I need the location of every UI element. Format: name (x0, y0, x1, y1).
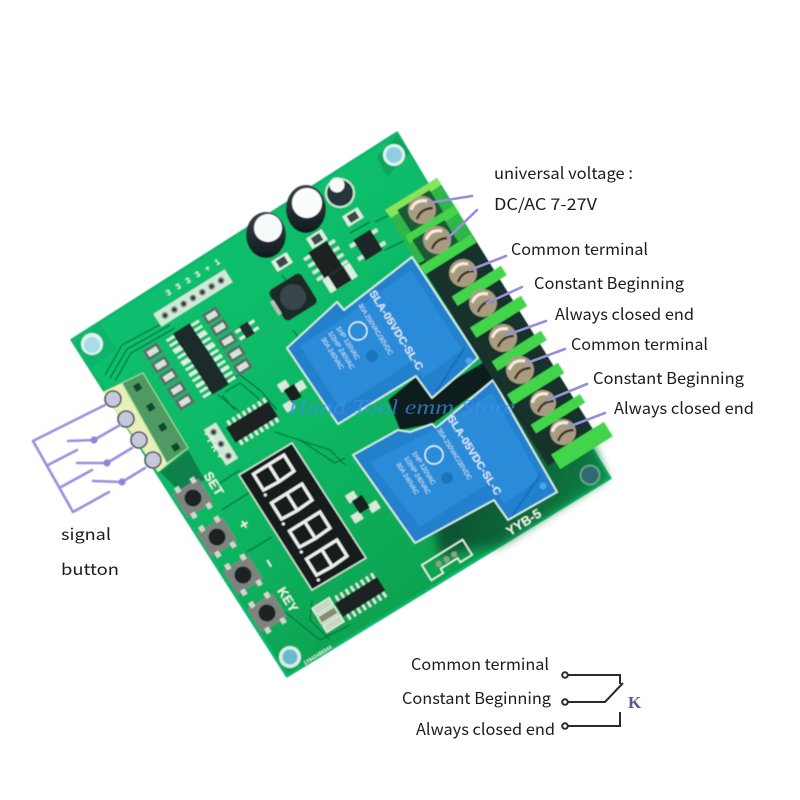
relay 2 small ratings (394, 450, 437, 496)
relay 1 (287, 257, 478, 424)
watermark: Hand Tool emm Store (287, 395, 515, 419)
small passives near capacitors (271, 207, 364, 272)
button + (195, 514, 239, 560)
small transistor (234, 318, 260, 342)
relay 2 ratings: 30A 250VAC/30VDC (435, 427, 473, 482)
relay 1 ratings: 30A 250VAC/30VDC (356, 302, 394, 357)
relay 1 small ratings: 1HP 120VAC (334, 325, 361, 362)
terminal 7 (517, 373, 585, 433)
terminal 8 (537, 400, 613, 469)
relay 2 small ratings: 1/2HP 240VAC (402, 455, 431, 496)
relay 1 small ratings: 30A 240VAC (319, 336, 345, 371)
button KEY (245, 590, 289, 636)
relay 2 small ratings: 1HP 120VAC (410, 450, 437, 487)
SOP main chip (223, 397, 281, 447)
bottom driver IC (331, 572, 389, 622)
K symbol: K (628, 693, 642, 712)
mounting hole: bottom (279, 646, 301, 668)
mounting hole: top (377, 135, 410, 177)
dark lower right PCB area (430, 400, 606, 556)
digit 2 (269, 484, 316, 526)
board silk: small code: 17943489244 (303, 645, 333, 667)
TR header (201, 422, 238, 466)
label: constant beginning 1: Constant Beginning (534, 270, 684, 294)
label: common terminal 1: Common terminal (511, 236, 648, 260)
capacitor 1 (246, 212, 286, 258)
resistors left and right of opto row (144, 308, 251, 409)
mounting hole: right (580, 464, 600, 486)
board silk: model: YYB-5 (503, 506, 544, 539)
digit 4 (304, 540, 351, 582)
button silk labels (201, 469, 301, 615)
digit 3 (287, 512, 334, 554)
push buttons (171, 475, 289, 636)
label: always closed end 2: Always closed end (614, 395, 754, 419)
shadow between relays (388, 362, 494, 430)
label: common terminal 2: Common terminal (571, 331, 708, 355)
button silk labels: KEY (274, 584, 301, 615)
legend text: always closed end: Always closed end (416, 716, 555, 740)
label: always closed end 1: Always closed end (555, 301, 694, 325)
PCB traces (105, 210, 410, 640)
terminal 4 (455, 272, 527, 338)
signal button wiring (33, 405, 145, 512)
small chip (348, 226, 388, 264)
driver transistor cluster (272, 372, 381, 524)
pin header: signal terminals (153, 257, 233, 327)
mounting hole: top left (74, 323, 118, 368)
label: signal: signal (61, 521, 111, 545)
capacitor 3 (325, 178, 355, 208)
power transistor (322, 263, 358, 293)
regulator chip (302, 237, 351, 285)
relay 2 (353, 380, 557, 543)
contact schematic (562, 672, 623, 729)
button silk labels: SET (201, 469, 227, 498)
JST connector outline (422, 540, 472, 580)
right screw terminal block (385, 178, 613, 469)
terminal 2 (406, 211, 476, 274)
capacitors (246, 178, 355, 258)
PCB base (72, 133, 610, 676)
label: universal voltage: universal voltage : (494, 160, 633, 184)
left green signal terminal (103, 373, 205, 490)
board photo: relay module (33, 133, 613, 676)
relay 2 small ratings: 30A 240VAC (394, 461, 420, 496)
label: button: button (61, 556, 119, 580)
relay 1 small ratings (319, 325, 361, 371)
label: DC/AC range: DC/AC 7-27V (494, 191, 598, 215)
relay 2 model text: SLA-05VDC-SL-C (444, 413, 504, 498)
relay contact legend (402, 651, 642, 740)
relay 1 small ratings: 1/2HP 240VAC (326, 330, 355, 371)
relay 1 model text: SLA-05VDC-SL-C (366, 288, 426, 373)
button - (221, 552, 265, 598)
terminal 5 (477, 307, 547, 371)
terminal 1 (391, 182, 459, 243)
terminal 6 (492, 339, 564, 405)
button silk labels: − (259, 555, 278, 572)
pin header labels: 3 3 3 3 + 1 (164, 257, 222, 298)
digit 1 (251, 455, 298, 497)
TR label: - T R + (201, 430, 226, 461)
legend text: constant beginning: Constant Beginning (402, 685, 551, 709)
inductor (265, 272, 319, 324)
terminal 3 (437, 242, 507, 306)
button silk labels: + (234, 516, 253, 533)
label: constant beginning 2: Constant Beginning (593, 365, 744, 389)
terminal pointer lines (428, 196, 605, 427)
legend text: common terminal: Common terminal (411, 651, 549, 675)
bottom passive pair (312, 598, 344, 632)
capacitor 2 (286, 185, 326, 233)
opto-coupler row (165, 318, 237, 400)
LED display (239, 443, 366, 590)
button SET (171, 475, 215, 521)
